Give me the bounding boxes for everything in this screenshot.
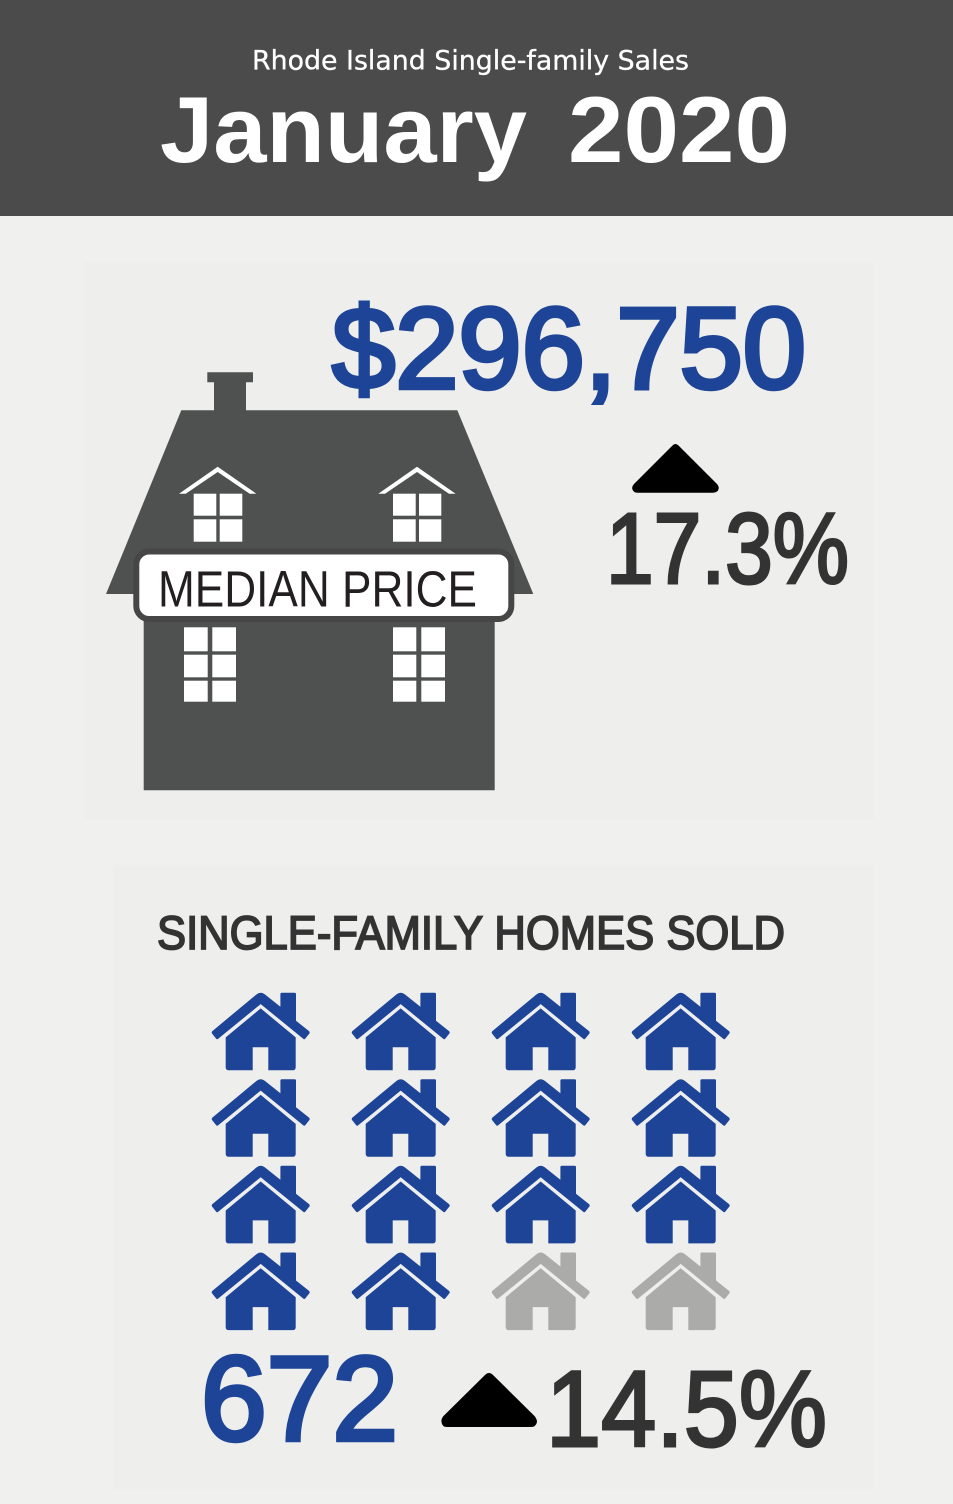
dormer windows <box>179 467 456 542</box>
panel: median price background <box>84 262 874 820</box>
icon: up arrow price <box>632 444 719 493</box>
ground floor windows <box>184 627 445 702</box>
icon: up arrow homes sold <box>441 1373 537 1427</box>
header band <box>0 0 953 216</box>
title: January <box>160 77 527 182</box>
median price value: $296,750 <box>332 285 806 413</box>
subtitle: Rhode Island Single-family Sales <box>252 46 689 76</box>
title <box>160 77 790 182</box>
homes sold value: 672 <box>201 1332 398 1466</box>
price change percent: 17.3% <box>606 493 849 605</box>
median price label: MEDIAN PRICE <box>158 560 477 618</box>
title: 2020 <box>568 77 790 182</box>
homes sold change percent: 14.5% <box>546 1348 827 1469</box>
panel: homes sold background <box>113 865 874 1490</box>
icon: large house with median price label <box>106 372 533 790</box>
icon grid: homes sold <box>212 993 730 1330</box>
homes sold heading: SINGLE-FAMILY HOMES SOLD <box>157 906 785 959</box>
